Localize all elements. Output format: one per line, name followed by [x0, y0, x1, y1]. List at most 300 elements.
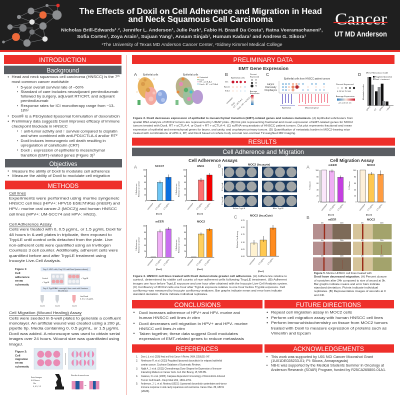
figure 2: cell migration schematic: Results of wound area: [71, 374, 89, 377]
text: background bullets: upregulation of calreticulin (CRT): [21, 144, 80, 148]
heading: cell adherence and migration: [132, 148, 395, 156]
text: cell migration assay: Cells were seeded in 6-well plates to generate a confluent: [9, 316, 122, 321]
text: future directions bullets: [267, 310, 388, 336]
figure 2: cell migration schematic: Serial images: [31, 377, 42, 379]
text: cell migration assay: [9, 310, 122, 346]
chart: mEER adherence: mEER: [156, 220, 164, 224]
chart C: MOC2 confluence: C: [234, 214, 237, 220]
chart C: MOC2 confluence: 0.25: [241, 220, 245, 222]
text: cell adherence assay: Cells were treated with 0, 0.5 µg/mL, or 1.5 µg/mL Doxil for: [9, 227, 122, 232]
chart C: MOC2 confluence: 1.5 µg/mL: [267, 258, 274, 266]
chart: mEER adherence: 80: [144, 232, 146, 234]
chart: HN31 adherence: 1.5 µg/mL: [204, 203, 211, 211]
chart: mEER migration: 60: [316, 183, 319, 185]
chart: SCC47 adherence: 100: [143, 170, 146, 172]
text: cell adherence assay: 48 hours in 6-well plates in triplicate, then exposed to: [9, 232, 113, 237]
subheading: cell adherence assays: Cell Adherence Assays: [188, 158, 238, 163]
chart: MOC2 migration: 0.5 µg/mL: [367, 204, 374, 212]
chart C: MOC2 confluence: 0.15: [241, 234, 245, 236]
chart: mEER migration: [Doxil]: [328, 214, 334, 216]
text: acknowledgements bullets: This work was supported by U01 NCI Cancer Moonshot Grant: [271, 355, 373, 359]
chart D: metastasis bars: MOC2 Metastasis model: [366, 71, 388, 74]
chart: SCC47 adherence: % Adherence: [135, 184, 138, 195]
text: future directions bullets: Perform cell migration assay with human HNSCC cell lines: [271, 315, 383, 320]
text: background bullets: 18%¹: [21, 109, 29, 113]
chart: MOC2 adherence: [175, 220, 214, 271]
chart: MOC2 adherence: untreated: [186, 259, 194, 267]
authors: [61, 28, 323, 39]
figure B: wound healing images: 24hr: [340, 222, 344, 224]
chart: SCC47 adherence: untreated: [146, 203, 154, 211]
text: future directions bullets: Repeat cell migration assay in MOC2 cells: [271, 310, 352, 315]
column divider: [125, 55, 128, 395]
chart: SCC47 adherence: 20: [144, 194, 146, 196]
text: future directions bullets: treated with Doxil to measure expression of proteins such as: [271, 325, 387, 330]
text: acknowledgements bullets: Anderson Research (SOAR) Program, funded by R25CA265800-01A1.: [271, 368, 386, 372]
chart B: dot plot: Average: [250, 90, 257, 93]
caption: figure 5: replicates. (B) Representative images of wounds at 0: [314, 289, 386, 293]
text: cell lines: cell lines (HPV+: UM-SCC74 and HPV-: HN31).: [9, 211, 97, 216]
figure 1: cell adherence schematic: adherence: [15, 275, 30, 279]
text: references list: Newhouse R, et al. (2023) Pegylated liposomal doxorubicin for relapsed epithelial: [141, 360, 222, 363]
chart A: UMAP plots: A: [134, 72, 137, 77]
chart B: dot plot: Doxil: [231, 102, 236, 107]
chart A: UMAP plots: Epithelial cells: [183, 73, 199, 76]
caption: figure 3: [133, 116, 354, 135]
chart B: dot plot: 25: [255, 80, 257, 82]
text: references list: immune response in oral cavity squamous cell carcinoma. Cancer Res. 86, LB151: [141, 386, 225, 389]
text: background bullets: checkpoint blockade in HNSCC: [12, 124, 68, 128]
figure 1: cell adherence schematic: Count: [40, 304, 45, 308]
figure B: MOC2 incucyte plate images: Before TrypLE: [233, 207, 246, 210]
chart C: MOC2 confluence: 0.20: [241, 227, 245, 229]
figure 2: cell migration schematic: migration: [15, 357, 28, 361]
figure 1: cell adherence schematic: + TrypLE: [81, 278, 89, 280]
text: background bullets: pembrolizumab: [21, 99, 48, 103]
chart: MOC2 adherence: 1.5 µg/mL: [204, 259, 211, 267]
chart B: dot plot: 50: [255, 83, 257, 85]
chart: HN31 adherence: HN31: [197, 164, 205, 168]
figure B: wound healing images: [306, 215, 392, 271]
chart C: scRNA-seq dot plot: Average Expression: [336, 95, 355, 98]
text: references list: Anderson, J. L. et al. Abstract LB151: Liposomal doxorubicin potentiates anti-tumor: [141, 382, 227, 385]
chart: mEER adherence: 0.5 µg/mL: [155, 259, 162, 267]
chart C: scRNA-seq dot plot: Epithelial: [282, 106, 291, 110]
chart C: MOC2 confluence: 0.10: [241, 242, 245, 244]
text: background bullets: [8, 75, 120, 157]
figure 2: cell migration schematic: 0, 0.5, 1.5: [33, 386, 41, 388]
caption: figure 4: [133, 274, 288, 296]
chart: SCC47 adherence: 1.5 µg/mL: [163, 203, 170, 211]
chart: MOC2 migration: 100: [353, 170, 356, 172]
chart: MOC2 adherence: 60: [184, 238, 186, 240]
text: conclusions bullets: expression of EMT-related genes to reduce metastasis: [139, 336, 244, 341]
caption: figure 5: [314, 271, 387, 297]
text: background bullets: Response rates for ICI monotherapy range from ~13-: [21, 104, 115, 108]
chart B: dot plot: Krt14: [225, 90, 230, 93]
text: background bullets: Head and neck squamous cell carcinoma (HNSCC) is the 7ᵗʰ: [12, 75, 120, 79]
figure B: MOC2 incucyte plate images: After TrypLE: [273, 207, 284, 210]
chart: SCC47 adherence: 0.5 µg/mL: [155, 203, 162, 211]
chart D: metastasis bars: Metastatic burden: [362, 84, 365, 100]
text: cell lines: HPV-: murine oral cancer-2 (MOC2)) and human HNSCC: [9, 206, 117, 211]
text: cell migration assay: ImageJ.: [9, 341, 23, 346]
caption: figure 5: Figure 5. Murine HNSCC cell lines treated with: [314, 271, 372, 275]
figure 1: cell adherence schematic: Cell: [15, 271, 20, 275]
subheading: cell migration assay: Cell Migration Assay: [330, 158, 375, 163]
chart B: dot plot: Epcam: [224, 87, 230, 89]
chart C: MOC2 confluence: [Doxil]: [258, 271, 264, 273]
caption: figure 5: Bar graphs indicate means and error bars indicate: [314, 282, 380, 286]
chart: HN31 adherence: 0.5 µg/mL: [196, 203, 203, 211]
chart: MOC2 migration: untreated: [358, 204, 366, 212]
text: background bullets: ↑ anti-tumor activity and ↑ survival compared to cisplatin: [21, 129, 117, 133]
figure B: MOC2 incucyte plate images: [218, 162, 297, 210]
caption: figure 5: of scratches after 24h compared to size of wound at 0h.: [314, 278, 386, 282]
chart: MOC2 migration: 40: [354, 190, 356, 192]
authors: Nicholas Brill-Edwards¹˒², Jennifer L. Anderson¹, Julie Park¹, Fabio H. Brasil Da Costa¹, Ratna Veeramachaneni¹,: [61, 28, 323, 33]
figure 2: cell migration schematic: [15, 348, 99, 390]
chart B: dot plot: 75: [255, 86, 257, 88]
text: references list: 3.: [136, 367, 138, 370]
figure 1: cell adherence schematic: Microfiltration: [58, 289, 68, 292]
text: background bullets: Preliminary data suggests Doxil improves efficacy of immune: [12, 120, 120, 124]
chart A: UMAP plots: Untreated: [200, 76, 208, 79]
figure 2: cell migration schematic: 0-24 hours: [31, 380, 40, 382]
title: and Neck Squamous Cell Carcinoma: [128, 15, 273, 24]
text: cell lines: [9, 190, 120, 216]
text: conclusions bullets: [133, 310, 249, 341]
chart: MOC2 migration: [348, 163, 386, 216]
chart A: UMAP plots: [134, 72, 218, 105]
text: cell adherence assay: [9, 222, 122, 263]
text: references list: ovarian cancer. Cochrane Database of Systematic Reviews.: [141, 364, 201, 367]
logo: MD Anderson Cancer: [334, 10, 388, 39]
chart C: MOC2 confluence: 0.5 µg/mL: [258, 258, 265, 266]
chart: MOC2 adherence: MOC2: [197, 220, 206, 224]
caption: figure 4: Figure 4. HNSCC cell lines treated with Doxil demonstrate greater cell adherence. (A) Adherence relative to: [133, 274, 287, 278]
figure B: MOC2 incucyte plate images: 1.5 µg/mL: [222, 197, 224, 205]
chart: mEER adherence: 40: [144, 245, 146, 247]
chart D: metastasis bars: aPD1+RT: [379, 103, 387, 112]
heading: acknowledgements: ACKNOWLEDGEMENTS: [293, 346, 364, 353]
chart: HN31 adherence: 100: [183, 170, 186, 172]
figure B: wound healing images: mEER: [328, 217, 336, 221]
chart C: scRNA-seq dot plot: Oral cavity: [265, 86, 277, 89]
chart: mEER adherence: 100: [143, 226, 146, 228]
chart: mEER migration: % Closure: [308, 181, 312, 190]
caption: figure 3: Figure 3. Doxil decreases expression of epithelial to mesenchymal transition (EMT)-related genes and reduces metastasis. (A) Epithelial subclusters from: [133, 116, 354, 120]
chart D: metastasis bars: [358, 71, 394, 112]
heading: results: RESULTS: [248, 139, 277, 146]
heading: conclusions: [132, 300, 262, 309]
chart: mEER migration: 80: [316, 176, 319, 178]
figure B: MOC2 incucyte plate images: untreated: [221, 168, 224, 176]
chart B: dot plot: B: [225, 72, 228, 77]
figure 1: cell adherence schematic: + TrypLE: [42, 282, 50, 284]
chart C: MOC2 confluence: 0.00: [241, 256, 245, 258]
text: cell adherence assay: non-adherent cells were quantified using an Invitrogen: [9, 242, 111, 247]
chart: mEER migration: 40: [316, 190, 319, 192]
chart: MOC2 migration: 0: [356, 202, 357, 204]
chart: mEER adherence: 60: [144, 238, 146, 240]
text: references list: 4.: [136, 375, 138, 378]
chart: MOC2 adherence: 0.5 µg/mL: [196, 259, 203, 267]
heading: preliminary data: PRELIMINARY DATA: [233, 57, 293, 64]
chart: MOC2 migration: MOC2: [367, 163, 376, 167]
text: future directions bullets: Vimentin and Epcam: [271, 331, 311, 336]
figure B: wound healing images: 0hr: [321, 256, 324, 258]
text: cell adherence assay: Countess 3 cell counter. Additionally, adherent cells were: [9, 247, 119, 252]
chart C: MOC2 confluence: 0.05: [241, 249, 245, 251]
figure B: wound healing images: MOC2: [367, 217, 376, 221]
figure B: MOC2 incucyte plate images: B: [218, 164, 221, 168]
chart C: scRNA-seq dot plot: Larynx: [267, 83, 275, 86]
chart C: MOC2 confluence: Relative Confluency: [236, 231, 239, 248]
subheading: EMT gene expression: EMT Gene Expression: [238, 66, 289, 71]
figure 2: cell migration schematic: Figure 2:: [15, 350, 27, 354]
chart: mEER migration: [308, 163, 346, 216]
text: cell migration assay: pipette tip. Media containing 0, 0.5 µg/mL, or 1.5 µg/mL: [9, 326, 120, 331]
chart: SCC47 adherence: 60: [144, 182, 146, 184]
title: The Effects of Doxil on Cell Adherence and Migration in Head: [79, 7, 322, 16]
text: cell migration assay: Cell Migration (Wound Healing) Assay: [9, 310, 82, 315]
text: cell lines: Experiments were performed using murine syngeneic: [9, 195, 119, 200]
caption: figure 4: confluency was measured by Incucyte confluency analyses. Bar graphs indicate mean and error bars indicate: [133, 289, 282, 293]
text: background bullets: Doxil induces immunogenic cell death resulting in: [21, 139, 106, 143]
text: cell adherence assay: TrypLE until control cells detached from the plate. Live: [9, 237, 114, 242]
figure 1: cell adherence schematic: Figure 1:: [15, 267, 27, 271]
heading: conclusions: CONCLUSIONS: [174, 302, 221, 309]
authors: Sofia Cortes¹, Zoya Arain¹, Sujuan Yang¹, Ansam Sinjab¹, Humam Kadara¹ and Andrew G. Sikora¹: [77, 34, 307, 39]
caption: figure 4: control, determined by viable cell counts of non-adherent cells following TrypLE treatment. (B) Adherent: [133, 278, 287, 282]
chart: mEER adherence: 0: [145, 257, 146, 259]
chart B: dot plot: Epithelial cells: [231, 76, 246, 80]
caption: figure 5: standard deviation. Points indicate individual: [314, 286, 378, 290]
chart C: scRNA-seq dot plot: 0 25 50 75 100: [337, 91, 352, 93]
chart D: metastasis bars: +Doxil: [386, 106, 392, 112]
figure B: wound healing images: 24hr: [340, 240, 344, 242]
chart A: UMAP plots: Epithelial cells: [143, 73, 159, 76]
text: background bullets: Standard of care includes neoadjuvant pembrolizumab: [21, 90, 118, 94]
chart: mEER migration: 1.5 µg/mL: [337, 204, 344, 212]
chart: HN31 adherence: 60: [184, 182, 186, 184]
chart: mEER adherence: untreated: [146, 259, 154, 267]
caption: figure 5: Doxil have decreased migration. (A) Percent closure: [314, 274, 387, 278]
chart D: metastasis bars: Pegylated liposomal: [375, 76, 393, 79]
text: background bullets: 5-year overall survival rate of ~60%: [21, 85, 84, 89]
figure 1: cell adherence schematic: 0, 0.5, 1.5 µg/mL: [80, 298, 94, 300]
text: objectives bullets: [8, 169, 110, 178]
chart: HN31 adherence: untreated: [186, 203, 194, 211]
chart: MOC2 migration: 20: [354, 196, 356, 198]
affiliations: ¹The University of Texas MD Anderson Cancer Center, ²Sidney Kimmel Medical College: [102, 42, 283, 47]
text: references list: 5.: [136, 382, 138, 385]
chart D: metastasis bars: RT: [374, 108, 378, 112]
text: cell adherence assay: quantified before and after TrypLE treatment using: [9, 253, 106, 258]
text: references list: Najiti A, J. et al. (2022) Chemotherapy Dose Shapes the Expression of Immune-: [141, 367, 222, 370]
label: A adherence: A: [134, 164, 137, 170]
caption: figure 3: spatial RNA analysis of MOC2 tumors are represented by UMAP plots. (B) Dot plot representing fractional and mean expression of EMT-related genes for MOC2: [133, 120, 353, 124]
heading: results: [132, 138, 395, 146]
icon: molecular network: [2, 4, 62, 47]
chart: HN31 adherence: 40: [184, 188, 186, 190]
text: conclusions bullets: HNSCC cell lines in vitro: [139, 326, 186, 331]
chart A: UMAP plots: Doxil: [200, 79, 204, 81]
text: background bullets: most common cancer worldwide: [12, 80, 69, 84]
chart C: scRNA-seq dot plot: -1.5 -0.5 0.5 1.5: [338, 102, 351, 104]
figure 1: cell adherence schematic: [15, 267, 94, 308]
logo: MD Anderson Cancer: Cancer: [335, 10, 388, 28]
figure 2: cell migration schematic: assay: [15, 361, 23, 365]
chart: MOC2 adherence: 40: [184, 245, 186, 247]
text: conclusions bullets: Doxil increases adherence of HPV+ and HPV- murine and: [139, 310, 240, 315]
chart: MOC2 migration: [Doxil]: [366, 214, 372, 216]
chart B: dot plot: Percent: [250, 73, 257, 76]
chart C: scRNA-seq dot plot: Percent Expressed: [336, 83, 354, 86]
chart: mEER adherence: Relative to Control: [138, 237, 140, 253]
text: cell adherence assay: Cell Adherence Assay: [9, 222, 52, 227]
chart: MOC2 adherence: Relative to Control: [178, 237, 180, 253]
chart C: MOC2 confluence: [234, 214, 279, 273]
heading: acknowledgements: [264, 344, 394, 353]
figure B: wound healing images: 0hr: [361, 256, 364, 258]
chart: mEER adherence: [Doxil]: [156, 269, 162, 271]
caption: figure 4: (C) Confluency of MOC2 cells one hour after TrypLE exposure relative to one hour before TrypLE exposure. Cell: [133, 285, 285, 289]
figure B: wound healing images: 0hr: [361, 240, 364, 242]
figure 2: cell migration schematic: Cell: [15, 353, 20, 357]
chart C: scRNA-seq dot plot: C: [266, 72, 269, 77]
figure 1: cell adherence schematic: schematic: [15, 282, 30, 286]
chart: mEER adherence: % Adherence: [135, 240, 138, 251]
figure 2: cell migration schematic: 10x: [33, 383, 36, 385]
figure B: wound healing images: 0hr: [321, 240, 324, 242]
text: cell lines: HNSCC cell lines (HPV+: HPV16 E6/E7/hRas (mEER) and: [9, 200, 120, 205]
heading: references: REFERENCES: [176, 346, 218, 353]
chart C: scRNA-seq dot plot: Mesenchymal: [305, 108, 319, 110]
text: background bullets: transition (EMT)-related genes (Figure 3)³: [21, 153, 95, 157]
text: conclusions bullets: Doxil decreases cell migration in HPV+ and HPV- murine: [139, 321, 249, 326]
chart D: metastasis bars: Doxil + treatment: [375, 78, 390, 81]
caption: figure 4: standard deviation. Points indicate individual replicates.: [133, 292, 208, 296]
chart: MOC2 adherence: 80: [184, 232, 186, 234]
figure 1: cell adherence schematic: Live/Dead: [80, 296, 88, 298]
heading: introduction: INTRODUCTION: [39, 57, 86, 64]
text: references list: Dunn L, Ij, et al. (2026) Head and Neck Cancer: A Review. JAMA, 335(6):531–547.: [141, 356, 210, 359]
chart: MOC2 adherence: 100: [183, 226, 186, 228]
chart: MOC2 adherence: % Adherence: [175, 240, 178, 251]
chart: HN31 adherence: [175, 164, 214, 215]
figure B: wound healing images: 24hr: [380, 222, 384, 224]
chart B: dot plot: Doxil + RT + aCTLA-4: [237, 95, 252, 111]
heading: background: Background: [47, 68, 80, 74]
heading: future directions: FUTURE DIRECTIONS: [296, 302, 361, 309]
text: background bullets: and when combined with anti-PD1/CTLA-4 and/or RT²: [21, 134, 118, 138]
heading: methods: METHODS: [48, 183, 79, 190]
figure 1: cell adherence schematic: Count: [55, 304, 60, 308]
chart B: dot plot: Untreated: [226, 97, 234, 105]
chart C: scRNA-seq dot plot: Epithelial cells from HNSCC patient tumors: [284, 77, 331, 80]
chart B: dot plot: Expressed: [250, 75, 259, 78]
heading: future directions: [264, 300, 394, 309]
chart: mEER migration: 100: [316, 170, 319, 172]
label: A migration: A: [306, 164, 310, 170]
text: acknowledgements bullets: [266, 355, 386, 372]
chart: HN31 adherence: 20: [184, 194, 186, 196]
text: references list: [136, 356, 227, 393]
heading: objectives: Objectives: [49, 161, 77, 168]
text: objectives bullets: Measure the ability of Doxil to modulate cell migration: [12, 174, 110, 178]
chart: mEER migration: 0: [318, 202, 319, 204]
chart B: dot plot: [224, 72, 259, 111]
figure B: wound healing images: 0hr: [361, 222, 364, 224]
text: cell migration assay: Doxil was added. A microscope was used to obtain serial: [9, 331, 120, 336]
chart: mEER migration: 20: [316, 196, 319, 198]
chart: SCC47 adherence: 40: [144, 188, 146, 190]
text: background bullets: Doxil® is a PEGylated liposomal formulation of doxorubicin: [12, 114, 120, 118]
figure B: wound healing images: B: [306, 215, 310, 220]
figure 1: cell adherence schematic: Day 1: HVC cells, Day 2-3: add Doxil (various doses): [43, 269, 88, 271]
chart B: dot plot: Vim: [225, 82, 229, 84]
figure B: wound healing images: 24hr: [340, 256, 344, 258]
chart: MOC2 adherence: 0: [185, 257, 186, 259]
chart: mEER adherence: [135, 220, 174, 271]
chart: HN31 adherence: Relative to Control: [178, 181, 180, 197]
chart C: scRNA-seq dot plot: [264, 72, 355, 110]
text: future directions bullets: Perform immunohistochemistry on tissue from MOC2 tumors: [271, 320, 388, 325]
caption: figure 4: images one hour before TrypLE exposure and one hour after obtained with the Incucyte Live-Cell Analysis system.: [133, 281, 288, 285]
chart C: MOC2 confluence: MOC2 (IncuCyte): [250, 214, 273, 218]
text: acknowledgements bullets: NB-E was supported by the Medical Students Summer in Oncology at: [271, 364, 384, 368]
figure 2: cell migration schematic: vs: [84, 385, 86, 387]
figure 2: cell migration schematic: schematic: [15, 364, 30, 368]
chart: mEER migration: mEER: [328, 163, 337, 167]
text: objectives bullets: Measure the ability of Doxil to modulate cell adherence: [12, 169, 110, 173]
caption: figure 5: and 24h.: [314, 293, 325, 297]
text: cell lines: Cell lines: [9, 190, 26, 195]
figure B: MOC2 incucyte plate images: MOC2 (Incucyte): [248, 162, 270, 166]
chart A: UMAP plots: Doxil + RT + aCTLA-4: [200, 83, 218, 86]
text: cell adherence assay: Incucyte Live-Cell Analysis.: [9, 258, 61, 263]
chart: SCC47 adherence: [Doxil]: [156, 213, 162, 215]
chart D: metastasis bars: aPD-1: [366, 106, 371, 112]
chart: SCC47 adherence: Relative to Control: [138, 181, 140, 197]
figure B: wound healing images: 24hr: [380, 240, 384, 242]
chart: SCC47 adherence: [135, 164, 174, 215]
chart: MOC2 adherence: 20: [184, 251, 186, 253]
caption: figure 3: expression of epithelial and mesenchymal genes for larynx, oral cavity, and oropharynx primary tumors. (D) Quantification of metastatic burden in MOC2-bearing mice: [133, 127, 350, 131]
text: conclusions bullets: Taken together, these data suggest Doxil modulates: [139, 331, 238, 336]
heading: objectives: [5, 159, 122, 168]
heading: introduction: [4, 55, 122, 64]
text: conclusions bullets: human HNSCC cell lines in vitro: [139, 315, 201, 320]
text: references list: Tumor Cell Death. J Exp Med 202, 1691-1701.: [141, 379, 192, 382]
chart: MOC2 migration: 80: [354, 176, 356, 178]
figure 1: cell adherence schematic: Day 4: TrypLE/Adh. overnight, then count with Countess: [43, 287, 88, 290]
text: cell migration assay: monolayer. An artificial wound was created using a 200 µL: [9, 321, 122, 326]
chart B: dot plot: RT + aCTLA-4: [233, 98, 243, 109]
chart: HN31 adherence: [Doxil]: [197, 213, 203, 215]
chart A: UMAP plots: RT + aCTLA-4: [200, 81, 212, 84]
chart C: scRNA-seq dot plot: Oropharynx: [264, 89, 278, 92]
chart: mEER adherence: 1.5 µg/mL: [163, 259, 170, 267]
text: references list: Interacting Markers on Cancer Cells. Cell. Mol. Bioeng. 15, 535-551.: [141, 371, 207, 374]
figure 1: cell adherence schematic: Control: [42, 277, 48, 280]
chart: SCC47 adherence: 80: [144, 176, 146, 178]
heading: background: [4, 66, 122, 74]
chart: mEER migration: untreated: [320, 204, 328, 212]
chart C: MOC2 confluence: untreated: [248, 258, 256, 266]
